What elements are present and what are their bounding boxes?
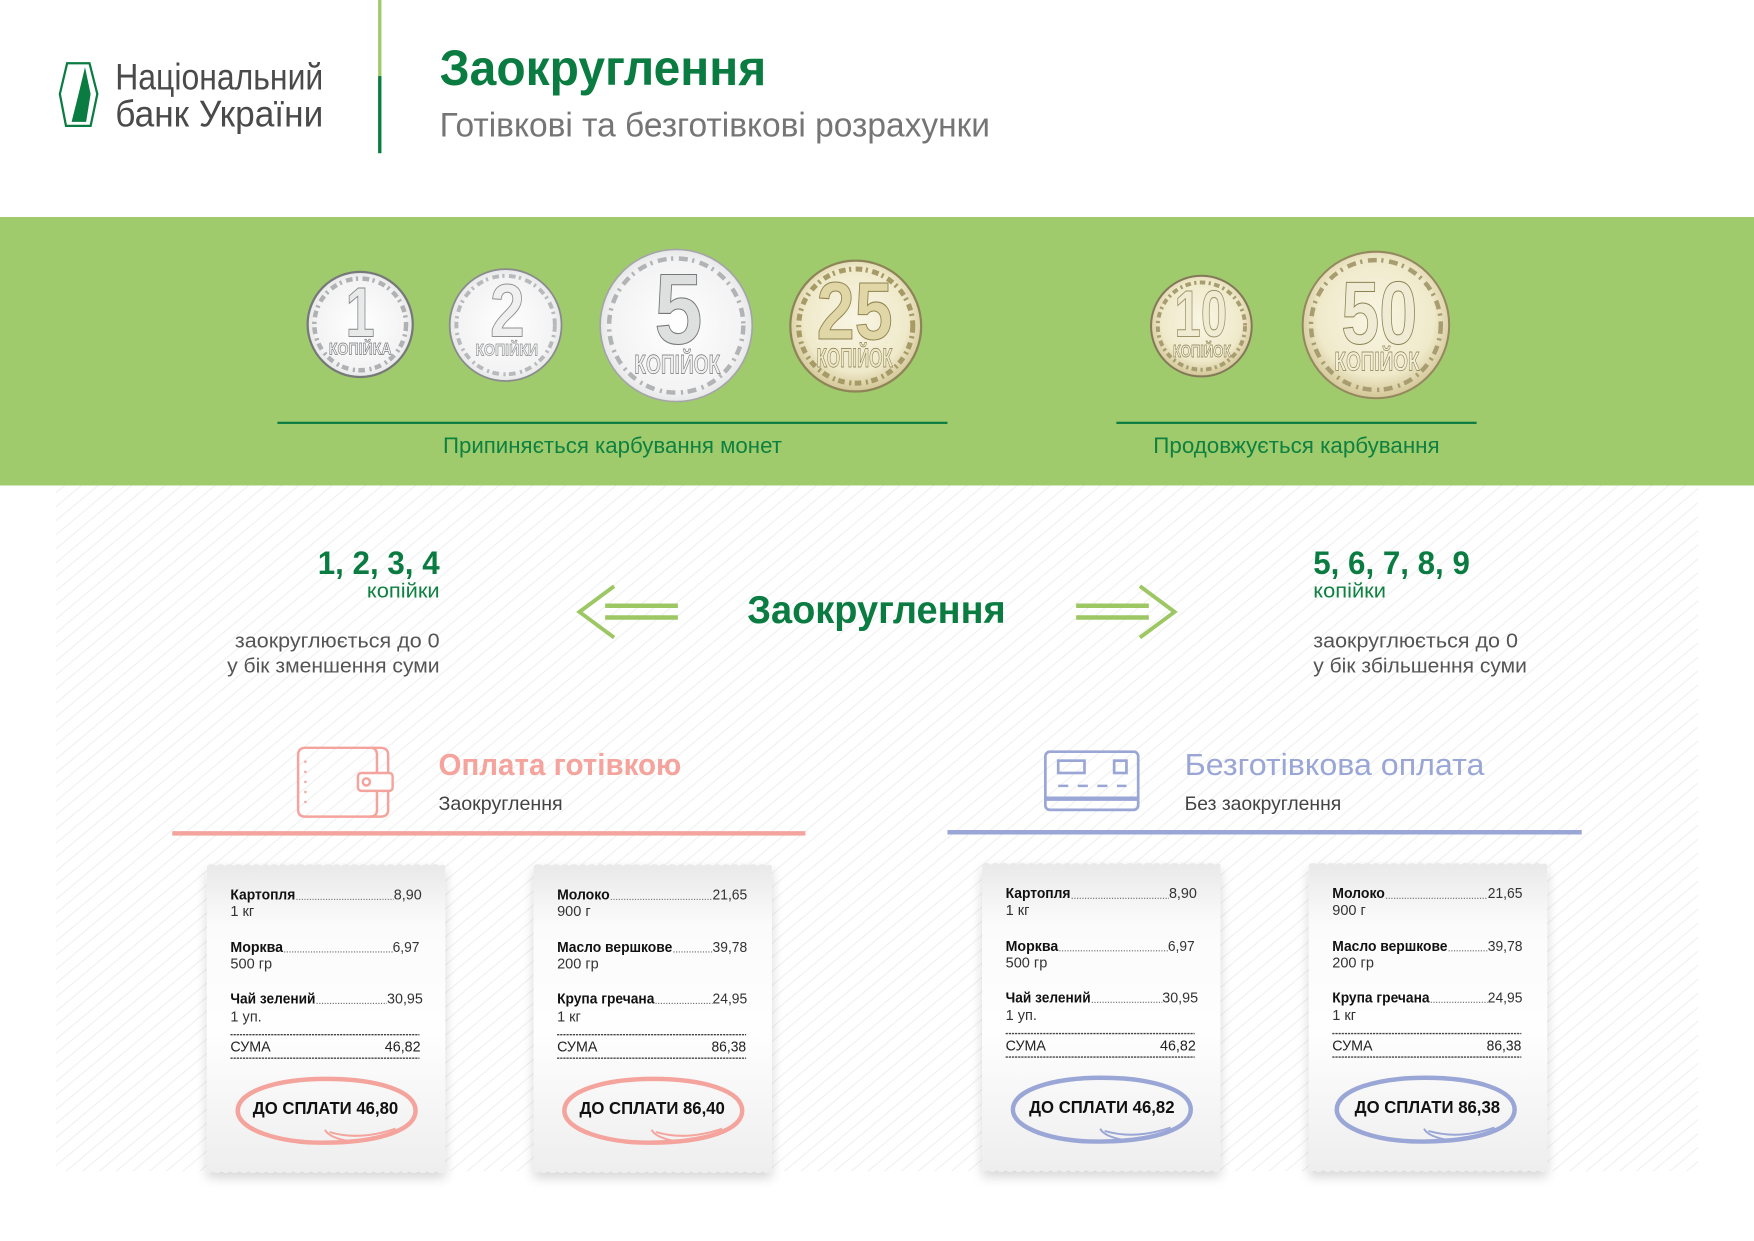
line and caption: discontinued coins: Припиняється карбування монет xyxy=(443,433,782,458)
receipt 3: СУМА xyxy=(1006,1038,1046,1054)
underline: cashless xyxy=(947,830,1582,834)
receipt 1: СУМА xyxy=(230,1040,271,1056)
receipt 2: 86,38 xyxy=(711,1040,746,1056)
panel: cash payment xyxy=(172,748,805,1173)
receipt 2: Масло вершкове xyxy=(557,940,672,956)
title: Заокруглення xyxy=(440,39,766,96)
receipt 1: Морква xyxy=(230,940,284,956)
text block: round up: заокруглюється до 0 xyxy=(1313,630,1518,653)
line and caption: continuing coins: Продовжується карбування xyxy=(1153,433,1440,458)
panel: cashless payment xyxy=(947,749,1582,1172)
receipt 2: 900 г xyxy=(557,904,591,920)
receipt 3: 46,82 xyxy=(1160,1038,1196,1054)
coin: 2 kopiyky: КОПІЙКИ xyxy=(475,341,538,360)
receipt 3: 1 кг xyxy=(1006,903,1029,919)
receipt 4: 1 кг xyxy=(1332,1008,1356,1024)
subheading: cash: Заокруглення xyxy=(439,794,563,815)
receipt 3: 30,95 xyxy=(1162,990,1198,1006)
heading: cashless: Безготівкова оплата xyxy=(1185,749,1485,782)
receipt 3 xyxy=(982,863,1220,1172)
receipt 2: СУМА xyxy=(557,1040,598,1056)
coin: 50 kopiyok: 50 xyxy=(1341,262,1417,362)
coin: 1 kopiyka: 1 xyxy=(346,273,375,352)
logo: National Bank of Ukraine xyxy=(60,56,323,134)
icon: bank card xyxy=(1045,752,1138,810)
coin: 10 kopiyok: КОПІЙОК xyxy=(1173,340,1231,361)
coin: 25 kopiyok: КОПІЙОК xyxy=(817,342,893,373)
text block: round up: 5, 6, 7, 8, 9 xyxy=(1313,545,1470,581)
receipt 3: 8,90 xyxy=(1169,886,1197,902)
receipt 1: 30,95 xyxy=(387,991,423,1007)
receipt 1: 8,90 xyxy=(394,887,422,903)
text block: round down: копійки xyxy=(367,580,440,602)
coin: 25 kopiyok xyxy=(790,261,921,392)
coin: 2 kopiyky: 2 xyxy=(490,269,525,353)
receipt 1 xyxy=(207,864,445,1173)
receipt 2: 39,78 xyxy=(713,940,747,956)
receipt 1: 1 уп. xyxy=(230,1009,262,1025)
heading: cash: Оплата готівкою xyxy=(439,749,681,782)
receipt 4 xyxy=(1309,863,1547,1172)
receipt 1: ДО СПЛАТИ 46,80 xyxy=(253,1098,398,1118)
arrow: right xyxy=(1076,586,1175,638)
receipt 4: 86,38 xyxy=(1487,1038,1521,1054)
coin: 1 kopiyka xyxy=(308,272,413,377)
coin: 5 kopiyok: КОПІЙОК xyxy=(634,349,721,380)
receipt 3: ДО СПЛАТИ 46,82 xyxy=(1029,1097,1175,1117)
receipt 4: 200 гр xyxy=(1332,956,1374,972)
subheading: cashless: Без заокруглення xyxy=(1185,794,1341,815)
icon: wallet xyxy=(298,748,393,817)
logo text xyxy=(115,56,323,134)
coin: 10 kopiyok xyxy=(1151,276,1252,376)
receipt 1: 500 гр xyxy=(230,957,272,973)
receipt 2 xyxy=(534,864,772,1173)
text block: round up xyxy=(1313,545,1527,677)
receipt 2: Крупа гречана xyxy=(557,991,655,1007)
coin: 50 kopiyok: КОПІЙОК xyxy=(1335,345,1420,376)
receipt 3: Картопля xyxy=(1006,886,1071,902)
receipt 3: Морква xyxy=(1006,939,1059,955)
receipt 4: 39,78 xyxy=(1488,939,1522,955)
coin: 2 kopiyky xyxy=(450,269,562,381)
receipt 2: 21,65 xyxy=(713,887,747,903)
center heading: Заокруглення xyxy=(747,589,1006,632)
receipt 4: 900 г xyxy=(1332,903,1366,919)
receipt 2: 1 кг xyxy=(557,1009,581,1025)
text block: round up: копійки xyxy=(1313,580,1386,602)
coin: 25 kopiyok: 25 xyxy=(817,266,893,357)
receipt 4: ДО СПЛАТИ 86,38 xyxy=(1355,1097,1500,1117)
text block: round down: 1, 2, 3, 4 xyxy=(318,545,440,581)
arrow: left xyxy=(579,586,678,638)
receipt 2: Молоко xyxy=(557,887,610,903)
receipt 1: 1 кг xyxy=(230,904,254,920)
coin: 5 kopiyok: 5 xyxy=(654,253,702,365)
logo text: Національний xyxy=(115,56,323,97)
hatched background area xyxy=(56,485,1698,1171)
receipt 4: Молоко xyxy=(1332,886,1385,902)
receipt 4: 24,95 xyxy=(1488,990,1522,1006)
receipt 4: Масло вершкове xyxy=(1332,939,1447,955)
receipt 1: 46,82 xyxy=(385,1040,421,1056)
receipt 2: 24,95 xyxy=(713,991,747,1007)
header divider xyxy=(378,0,381,153)
receipt 2: 200 гр xyxy=(557,957,599,973)
receipt 3: Чай зелений xyxy=(1006,990,1091,1006)
receipt 3: 6,97 xyxy=(1168,939,1195,955)
receipt 4: 21,65 xyxy=(1488,886,1522,902)
coin: 5 kopiyok xyxy=(600,249,752,402)
receipt 1: Картопля xyxy=(230,887,295,903)
receipt 4: СУМА xyxy=(1332,1038,1373,1054)
receipt 1: 6,97 xyxy=(393,940,419,956)
coin: 50 kopiyok xyxy=(1303,252,1449,398)
text block: round down xyxy=(227,545,440,677)
text block: round down: заокруглюється до 0 xyxy=(235,630,440,653)
subtitle: Готівкові та безготівкові розрахунки xyxy=(440,106,990,144)
text block: round up: у бік збільшення суми xyxy=(1313,654,1527,677)
underline: cash xyxy=(172,831,805,836)
receipt 2: ДО СПЛАТИ 86,40 xyxy=(579,1098,725,1118)
panel: coins band xyxy=(0,217,1754,485)
logo text: банк України xyxy=(115,93,323,134)
receipt 1: Чай зелений xyxy=(230,991,315,1007)
receipt 3: 1 уп. xyxy=(1006,1008,1037,1024)
receipt 4: Крупа гречана xyxy=(1332,990,1430,1006)
logo icon xyxy=(60,63,97,126)
coin: 1 kopiyka: КОПІЙКА xyxy=(329,340,392,359)
receipt 3: 500 гр xyxy=(1006,956,1047,972)
text block: round down: у бік зменшення суми xyxy=(227,654,440,677)
coin: 10 kopiyok: 10 xyxy=(1175,277,1227,351)
